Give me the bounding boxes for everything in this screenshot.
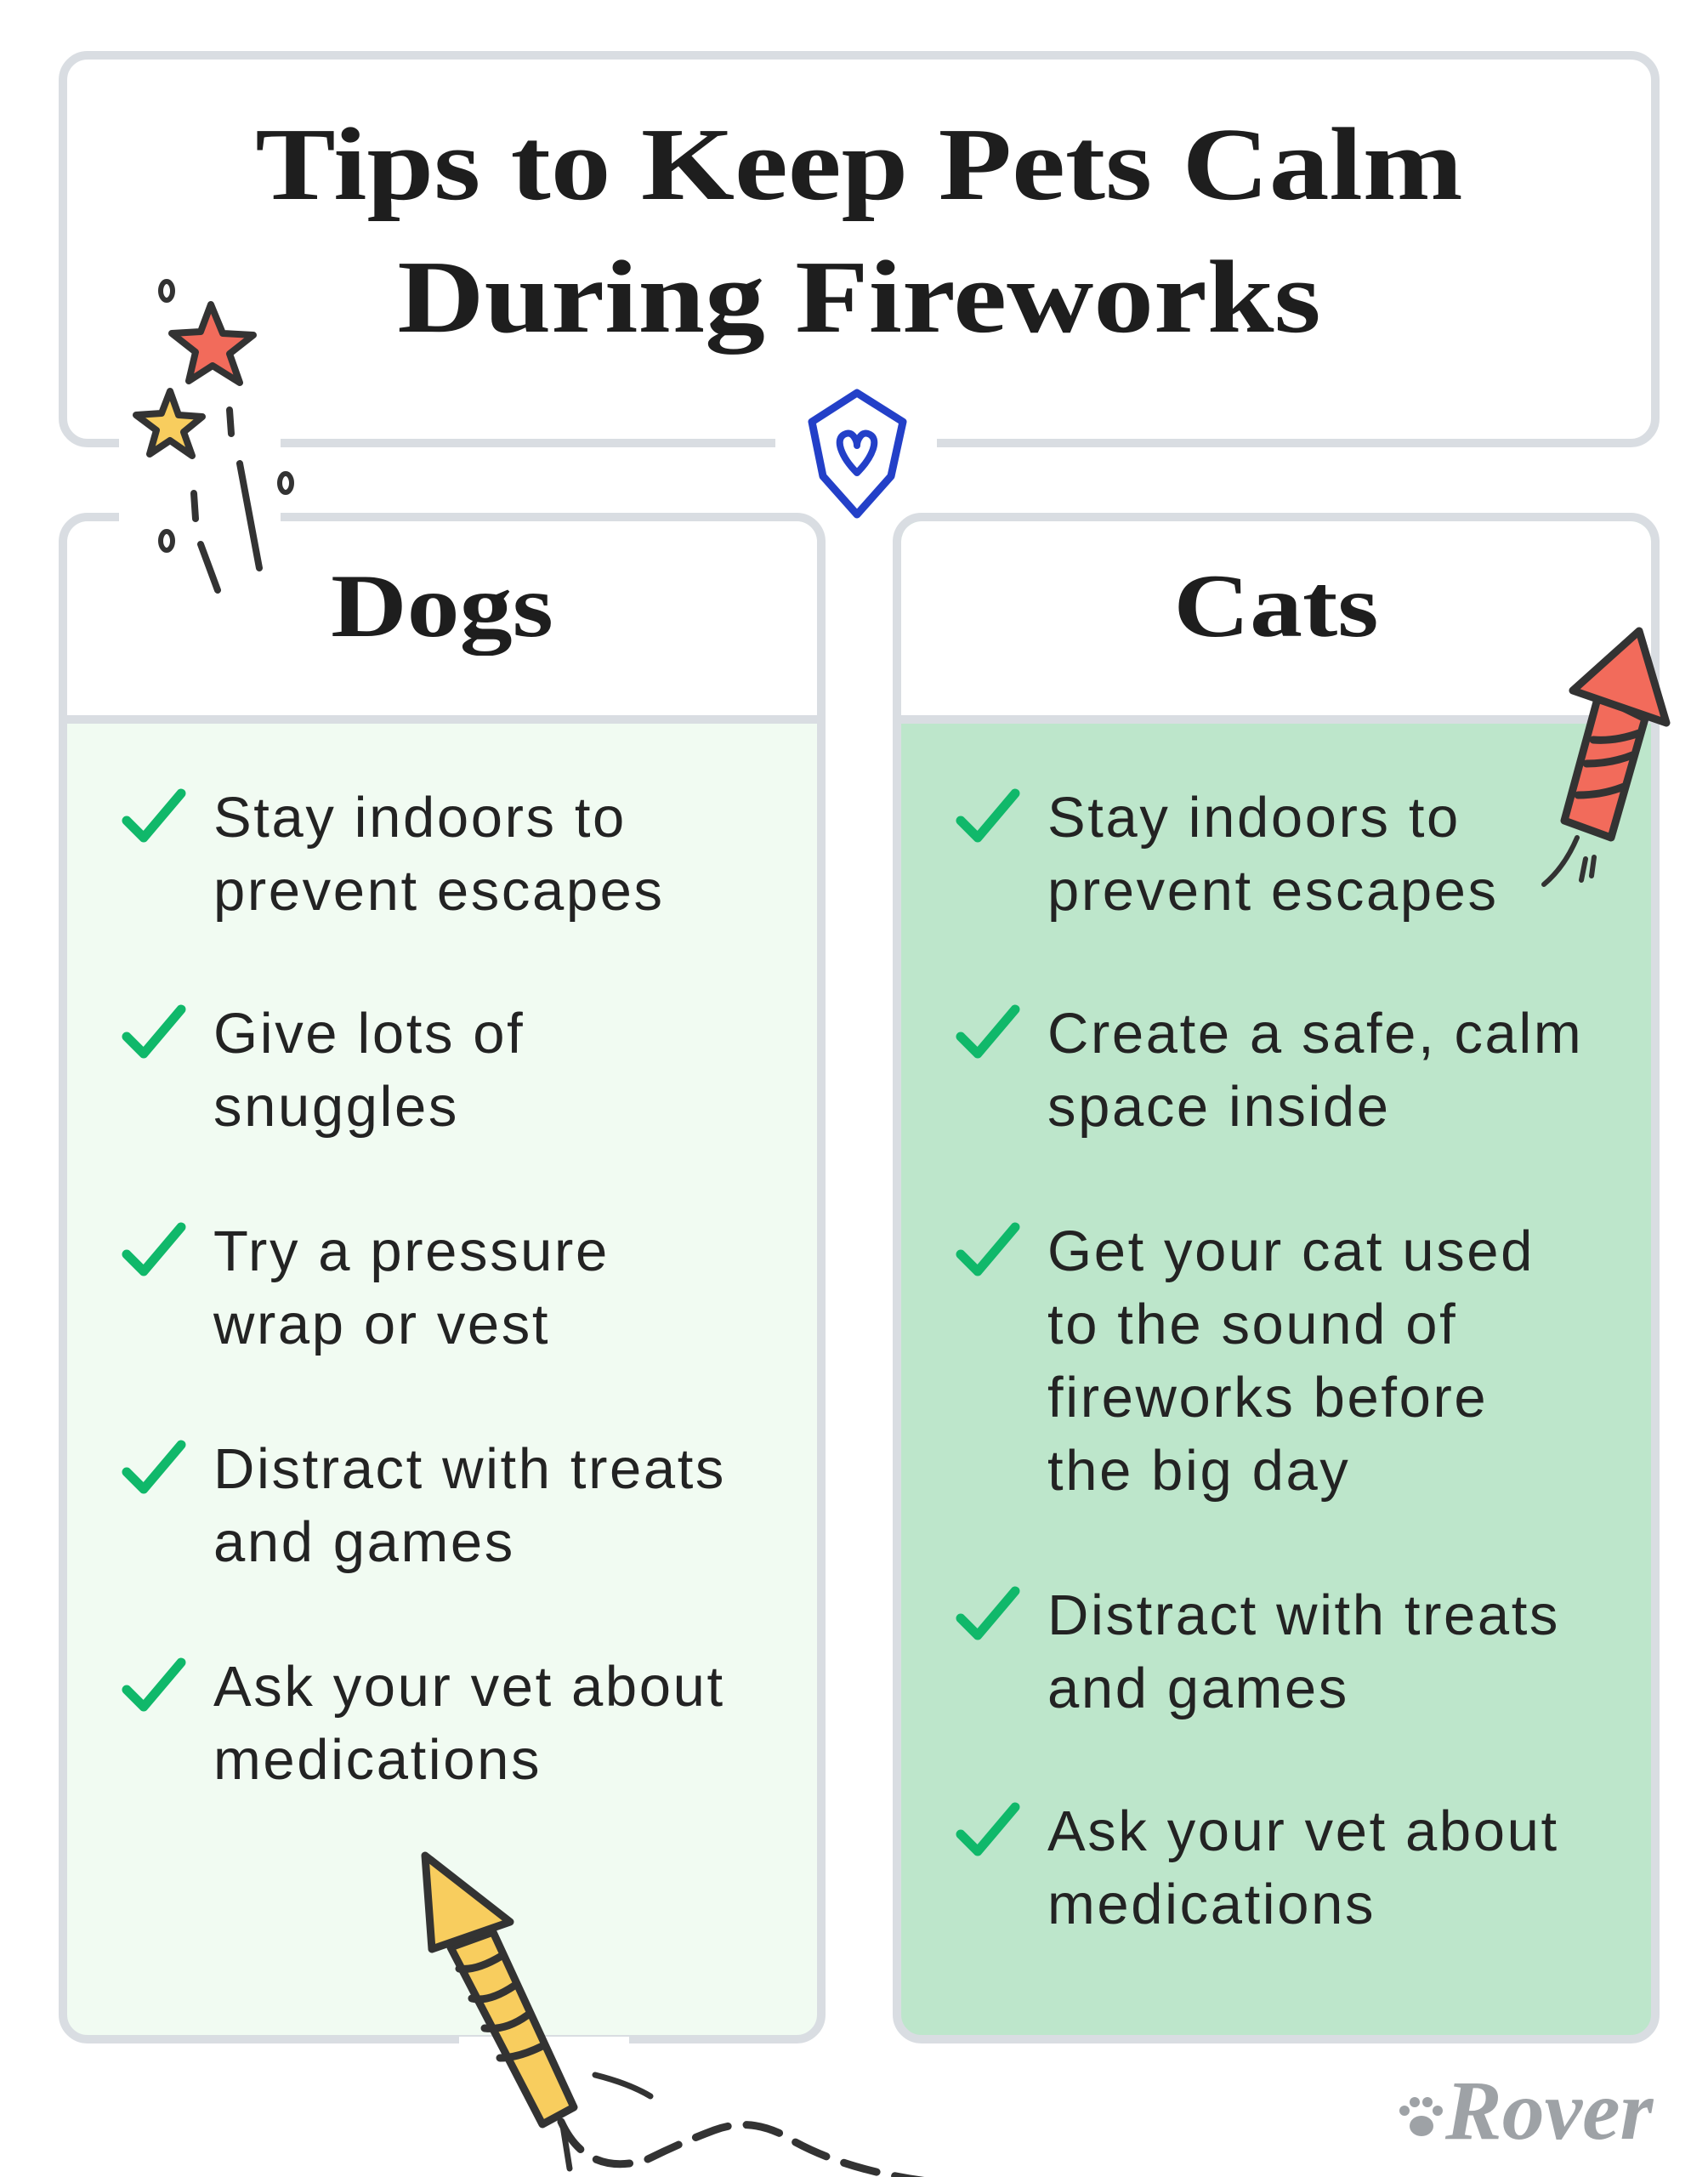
item: Try a pressure [213,1219,610,1283]
item [956,786,1499,923]
item [122,1655,725,1792]
item [122,1219,610,1356]
item: Stay indoors to [1047,786,1461,850]
item [122,1002,525,1139]
item: medications [1047,1873,1376,1936]
cats list [956,786,1583,1936]
item: snuggles [213,1075,459,1139]
item: Create a safe, calm [1047,1002,1583,1066]
heading: cats: Cats [1173,556,1379,656]
item: Ask your vet about [213,1655,725,1719]
icon: shield heart [775,393,937,514]
item [956,1583,1560,1720]
item [122,1437,726,1574]
item: fireworks before [1047,1366,1488,1430]
icon: stars and sparks [119,281,292,590]
icon: yellow rocket [425,1856,969,2177]
item: prevent escapes [1047,859,1499,923]
title: During Fireworks [397,240,1321,355]
item: Distract with treats [213,1437,726,1501]
item [956,1799,1559,1936]
item: Get your cat used [1047,1219,1535,1283]
item: space inside [1047,1075,1391,1139]
item: wrap or vest [213,1293,550,1356]
item: medications [213,1728,542,1792]
logo: Rover: Rover [1445,2063,1653,2157]
icon: paw [1399,2097,1443,2136]
dogs list [122,786,726,1792]
panel: dogs [59,513,826,2043]
item: and games [213,1510,515,1574]
item: Stay indoors to [213,786,627,850]
item [956,1002,1583,1139]
icon: red rocket [1544,631,1666,884]
item: Ask your vet about [1047,1799,1559,1863]
item: the big day [1047,1439,1350,1503]
title: Tips to Keep Pets Calm [255,107,1463,222]
item [122,786,665,923]
title panel [59,51,1660,447]
title [255,107,1463,355]
item [956,1219,1535,1503]
item: Give lots of [213,1002,525,1066]
item: to the sound of [1047,1293,1457,1356]
item: prevent escapes [213,859,665,923]
item: and games [1047,1657,1349,1720]
heading: dogs: Dogs [331,556,553,656]
panel: cats [893,513,1660,2043]
item: Distract with treats [1047,1583,1560,1647]
